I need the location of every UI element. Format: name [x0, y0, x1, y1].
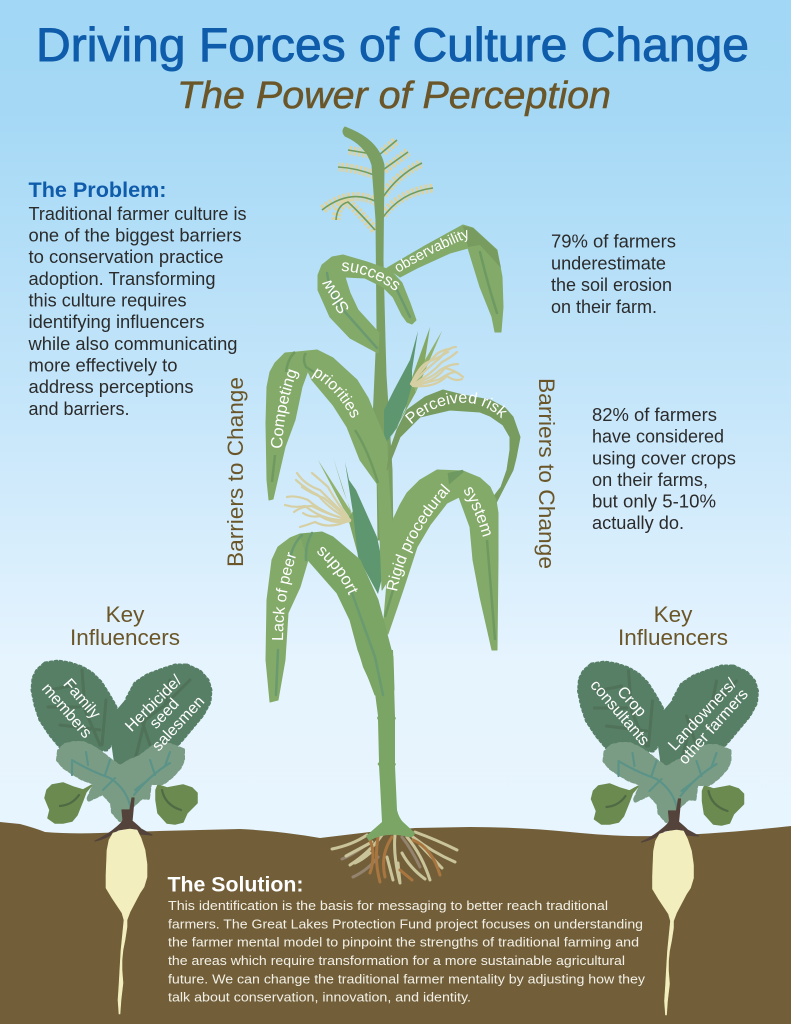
leaf: rigid procedural system: Rigid procedural: [386, 484, 450, 591]
text block: the solution: [168, 873, 645, 1005]
heading: key influencers right: Key: [654, 602, 693, 627]
stat: cover crops: [592, 405, 736, 533]
text block: the solution: The Solution:: [168, 873, 304, 897]
leaf: observability: observability: [396, 230, 468, 272]
text block: the problem: more effectively to: [28, 356, 177, 376]
stat: soil erosion: underestimate: [551, 254, 666, 274]
heading: key influencers left: [70, 602, 180, 650]
leaf: lack of peer support: Lack of peer: [272, 552, 296, 640]
leaf labels right: Landowners/: [665, 675, 741, 754]
text block: the solution: farmers. The Great Lakes Protection Fund project focuses on understanding: [168, 916, 643, 931]
heading: barriers to change left: Barriers to Change: [223, 377, 248, 567]
heading: key influencers right: Influencers: [618, 625, 728, 650]
leaf labels right: Crop: [613, 683, 649, 721]
leaf: slow success: Slow: [322, 280, 348, 314]
leaf labels left: members: [38, 680, 95, 742]
leaf: slow success: [318, 254, 416, 354]
leaf labels right: [586, 675, 752, 768]
stat: soil erosion: [551, 232, 676, 317]
corn stem upper: [343, 127, 393, 540]
subtitle: The Power of Perception: [177, 75, 611, 117]
leaf: priorities: priorities: [311, 368, 358, 418]
leaf labels left: [38, 672, 208, 755]
tassel: [322, 140, 433, 230]
text block: the problem: and barriers.: [28, 399, 130, 419]
heading: key influencers left: Influencers: [70, 625, 180, 650]
stat: cover crops: 82% of farmers: [592, 405, 717, 425]
heading: barriers to change right: Barriers to Change: [534, 378, 559, 569]
stat: cover crops: but only 5-10%: [592, 492, 716, 512]
text block: the problem: The Problem:: [28, 178, 166, 202]
title: Driving Forces of Culture Change: [36, 18, 749, 71]
text block: the problem: while also communicating: [27, 334, 237, 354]
text block: the solution: talk about conservation, innovation, and identity.: [168, 990, 471, 1005]
text block: the solution: the farmer mental model to pinpoint the strengths of traditional farming and: [168, 935, 639, 950]
leaf labels left: salesmen: [149, 693, 208, 755]
leaf: priorities: [297, 350, 392, 590]
corn stem lower: [358, 650, 415, 841]
leaf: observability: [386, 224, 504, 332]
leaf labels left: seed: [147, 695, 183, 732]
text block: the problem: to conservation practice: [28, 247, 224, 267]
corn plant: [266, 126, 520, 884]
leaf: competing: Competing: [270, 369, 300, 448]
leaf: lack of peer support: [266, 532, 394, 702]
leaf: perceived risk: [386, 390, 520, 503]
leaf: competing: [266, 351, 308, 500]
text block: the problem: one of the biggest barriers: [28, 226, 242, 246]
leaf labels left: Family: [60, 676, 103, 722]
text block: the problem: address perceptions: [28, 377, 194, 397]
text block: the solution: the areas which require transformation for a more sustainable agricultural: [168, 953, 625, 968]
soil ground: [0, 822, 791, 1024]
leaf: perceived risk: Perceived risk: [405, 392, 507, 424]
stat: cover crops: on their farms,: [592, 470, 708, 490]
stat: soil erosion: 79% of farmers: [551, 232, 676, 252]
text block: the problem: adoption. Transforming: [28, 269, 216, 289]
stat: cover crops: actually do.: [592, 513, 684, 533]
heading: key influencers right: [618, 602, 728, 650]
plant: left kale and radish: [32, 661, 211, 1014]
stat: cover crops: have considered: [592, 426, 724, 446]
text block: the problem: identifying influencers: [28, 312, 204, 332]
plant: right kale and radish: [578, 662, 758, 1015]
text block: the problem: this culture requires: [28, 291, 186, 311]
leaf labels right: other farmers: [676, 686, 752, 768]
upper ear husk and silk: [384, 327, 463, 445]
text block: the solution: future. We can change the traditional farmer mentality by adjusting how they: [168, 971, 645, 986]
leaf: rigid procedural system: [384, 470, 498, 650]
leaf: lack of peer support: support: [317, 546, 358, 596]
leaf: rigid procedural system: system: [464, 487, 491, 537]
text block: the problem: Traditional farmer culture is: [28, 204, 246, 224]
leaf labels right: consultants: [586, 677, 652, 749]
stat: cover crops: using cover crops: [592, 448, 736, 468]
lower ear husk and silk: [285, 457, 384, 594]
heading: key influencers left: Key: [106, 602, 145, 627]
text block: the problem: [27, 178, 246, 419]
leaf labels left: Herbicide/: [122, 672, 186, 735]
text block: the solution: This identification is the basis for messaging to better reach traditional: [168, 898, 608, 913]
leaf: slow success: success: [342, 262, 400, 290]
corn roots: [332, 832, 457, 883]
stat: soil erosion: the soil erosion: [551, 275, 672, 295]
stat: soil erosion: on their farm.: [551, 297, 657, 317]
